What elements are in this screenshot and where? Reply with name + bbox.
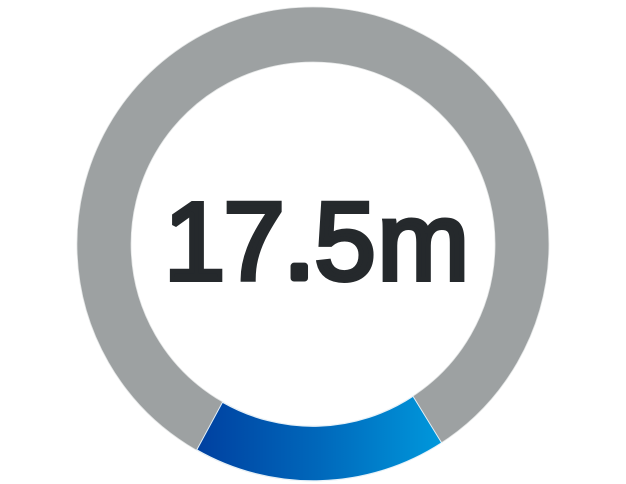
donut segment: blue share (197, 396, 442, 481)
donut ring: grey remainder (77, 7, 549, 481)
value label: 17.5m: m (378, 180, 469, 304)
value label: 17.5m: 7 (224, 180, 285, 304)
value label: 17.5m: 5 (314, 180, 376, 304)
value label: 17.5m: 1 (164, 180, 225, 304)
value label: 17.5m: . (284, 179, 315, 302)
